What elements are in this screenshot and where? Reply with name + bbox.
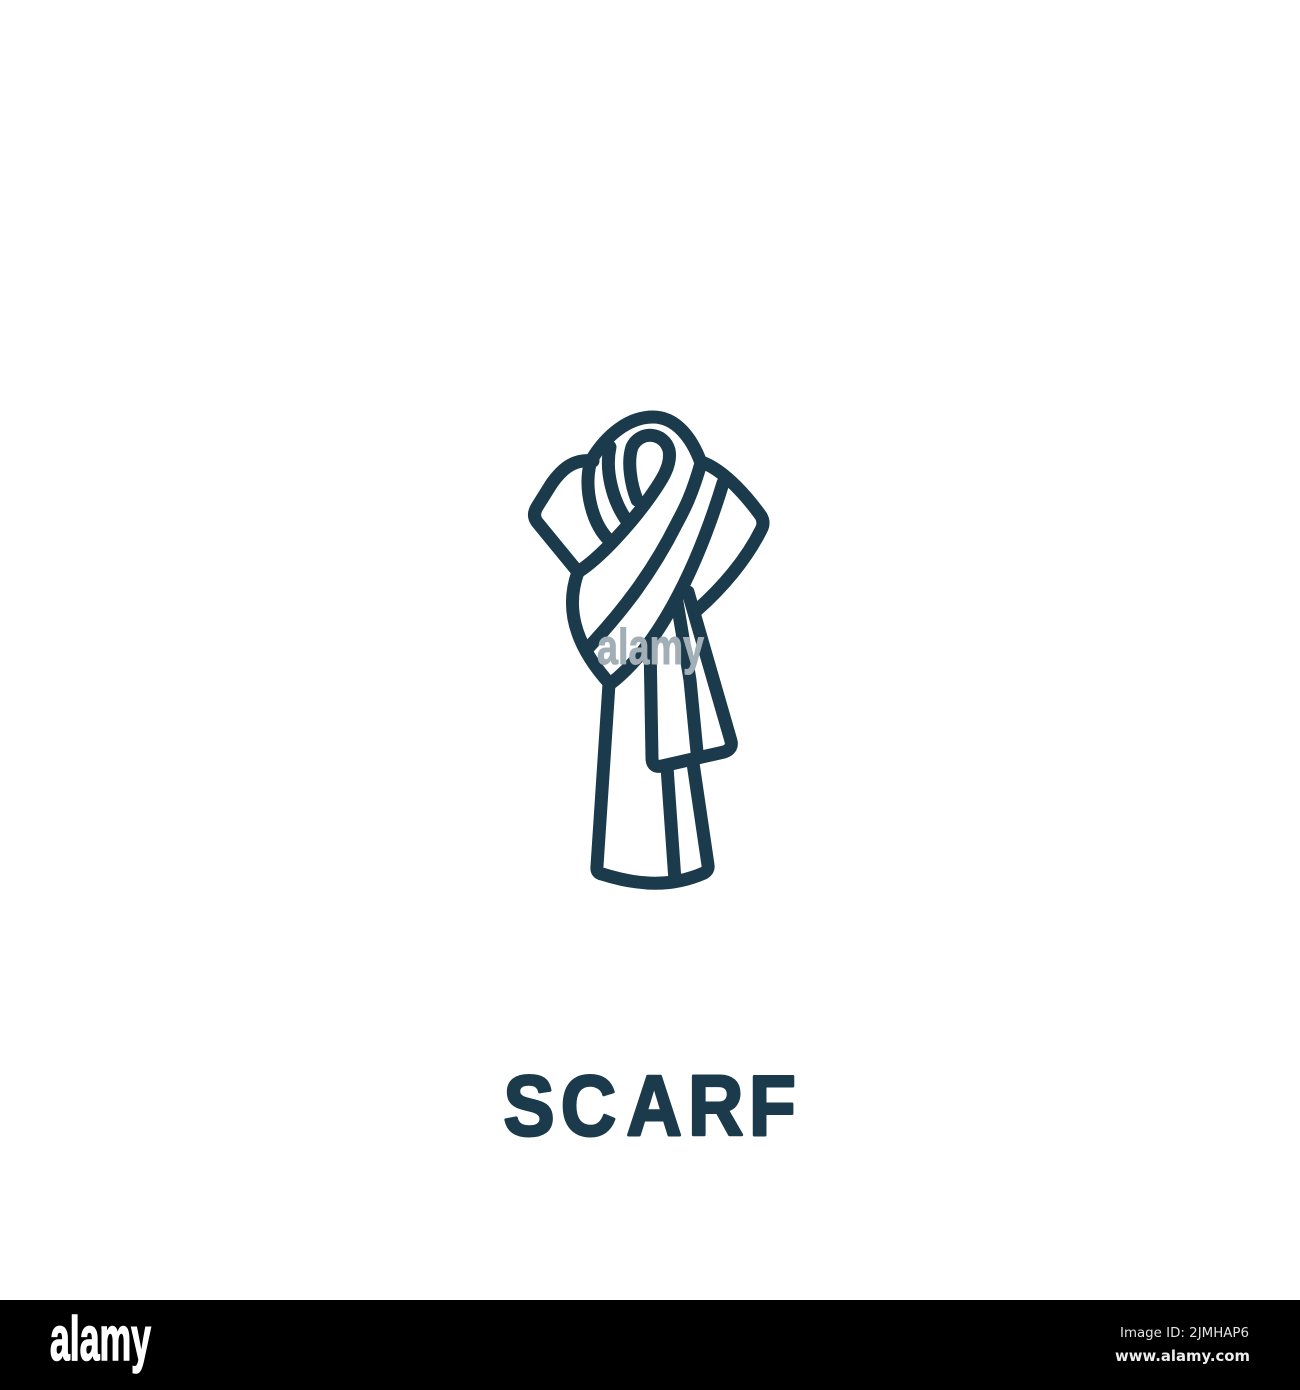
- watermark: alamy: [597, 619, 704, 675]
- website: www.alamy.com: [1115, 1347, 1250, 1365]
- left flap: [534, 461, 593, 572]
- right flap: [697, 463, 763, 610]
- outer loop and band top edge: [588, 417, 701, 648]
- front flap: [650, 592, 731, 766]
- knot fold middle: [608, 447, 627, 521]
- band lower edge: [572, 483, 723, 684]
- middle fold: [667, 767, 675, 881]
- left fall: [597, 684, 708, 883]
- inner knot loop: [578, 435, 670, 572]
- title: SCARF: [503, 1060, 796, 1154]
- image id: Image ID: 2JMHAP6: [1120, 1325, 1249, 1341]
- inner flap line: [677, 602, 697, 752]
- icon: scarf: [534, 417, 763, 883]
- footer logo: alamy: [50, 1305, 151, 1374]
- knot fold left: [588, 464, 611, 542]
- footer bar: [0, 1300, 1300, 1390]
